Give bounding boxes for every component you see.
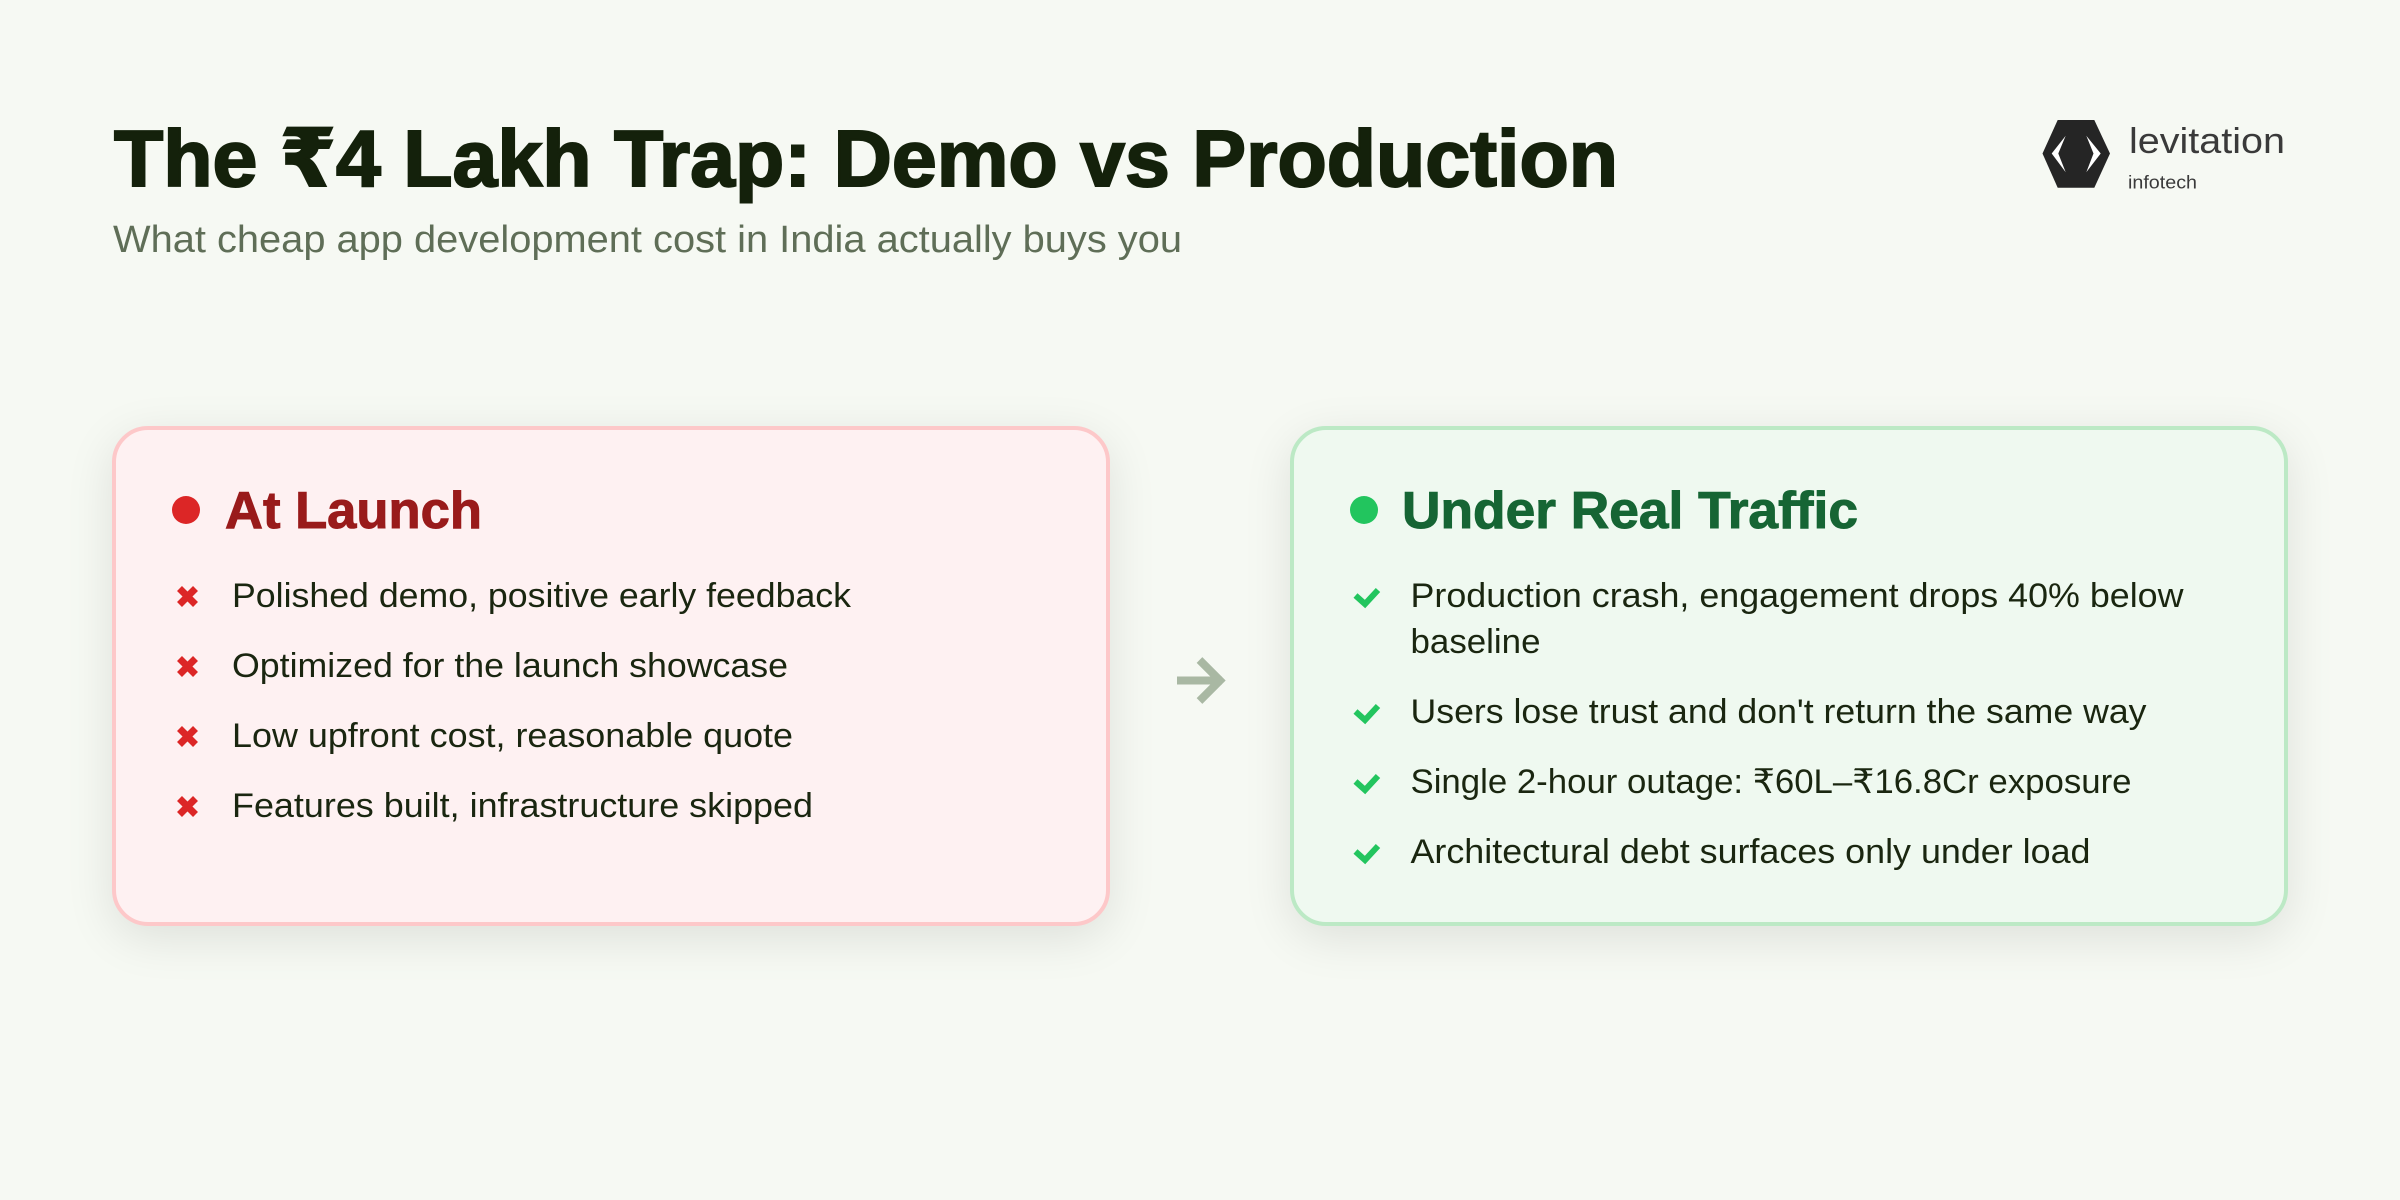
subtitle: What cheap app development cost in India actually buys you (113, 219, 1182, 261)
logo: levitation infotech (2042, 120, 2285, 192)
panel: Under Real Traffic (1290, 426, 2288, 926)
status dot: green (1350, 496, 1378, 524)
list item 4: Architectural debt surfaces only under load (1410, 833, 2090, 871)
header (113, 114, 2285, 261)
list item 1: Polished demo, positive early feedback (232, 577, 852, 615)
icon: check (1356, 590, 1378, 604)
list item 1: Production crash, engagement drops 40% below (1410, 577, 2184, 615)
icon: hexagon logo mark (2042, 120, 2110, 188)
icon: check (1356, 706, 1378, 720)
list item 4: Features built, infrastructure skipped (232, 787, 813, 825)
panel: At Launch (112, 426, 1110, 926)
list item 1 (1356, 577, 2184, 661)
arrow (1177, 657, 1226, 704)
list item 1: baseline (1410, 623, 1540, 661)
logo sub-wordmark: infotech (2128, 172, 2197, 192)
icon: cross (180, 658, 196, 674)
title: The ₹4 Lakh Trap: Demo vs Production (114, 114, 1618, 203)
icon: cross (180, 728, 196, 744)
list item 3: Single 2-hour outage: ₹60L–₹16.8Cr exposure (1410, 763, 2132, 801)
list item 2: Users lose trust and don't return the same way (1410, 693, 2146, 731)
icon: cross (180, 798, 196, 814)
heading: Under Real Traffic: Under Real Traffic (1402, 482, 1858, 540)
icon: check (1356, 776, 1378, 790)
list item 2: Optimized for the launch showcase (232, 647, 788, 685)
status dot: red (172, 496, 200, 524)
heading: At Launch: At Launch (225, 482, 482, 540)
icon: cross (180, 588, 196, 604)
logo wordmark: levitation (2129, 120, 2285, 161)
list item 3: Low upfront cost, reasonable quote (232, 717, 793, 755)
icon: check (1356, 846, 1378, 860)
